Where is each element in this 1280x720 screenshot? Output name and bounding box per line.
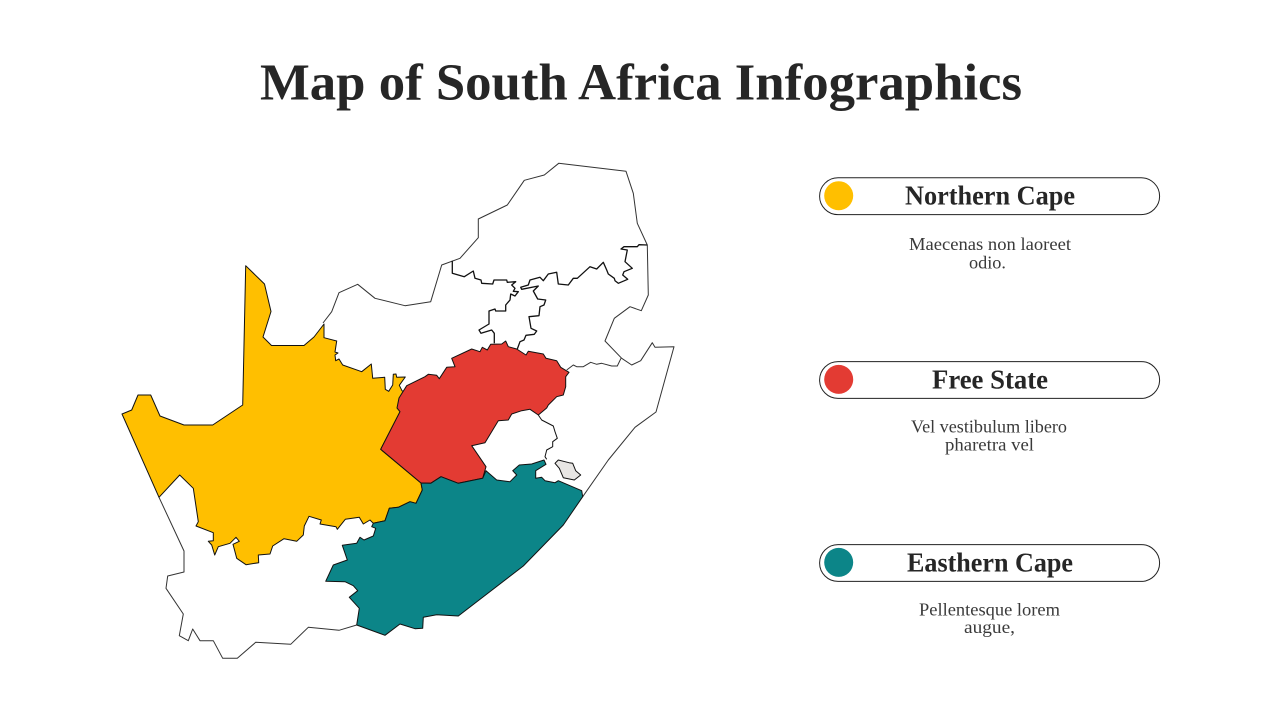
legend item: Northern Cape [820, 178, 1160, 273]
border: Mpumalanga north [517, 245, 647, 349]
marker [824, 365, 853, 394]
description [909, 234, 1071, 273]
border: Limpopo and Mpumalanga [452, 261, 518, 343]
description: pharetra vel [945, 434, 1034, 454]
region: Northern Cape [122, 266, 422, 565]
description: augue, [964, 617, 1015, 637]
legend item: Free State [820, 362, 1160, 454]
legend item: Eastern Cape [820, 545, 1160, 637]
border: KwaZulu-Natal north [567, 358, 621, 370]
description: Pellentesque lorem [919, 599, 1060, 619]
description [911, 416, 1067, 454]
pill [820, 178, 1160, 215]
map of South Africa [122, 163, 674, 658]
region: Swaziland enclave [555, 460, 581, 480]
region: Western Cape [159, 497, 357, 658]
pill [820, 362, 1160, 398]
description [919, 599, 1060, 637]
description: Maecenas non laoreet [909, 234, 1071, 254]
region: Lesotho border [538, 415, 557, 459]
region: northern and eastern provinces outline [323, 163, 674, 497]
marker [824, 181, 853, 210]
region: Eastern Cape [326, 460, 583, 635]
heading: Easthern Cape [907, 547, 1073, 577]
region: Free State [381, 341, 569, 483]
description: Vel vestibulum libero [911, 416, 1067, 436]
heading: Northern Cape [905, 180, 1075, 210]
heading: Free State [932, 364, 1048, 394]
title: Map of South Africa Infographics [260, 54, 1022, 112]
description: odio. [969, 253, 1006, 273]
marker [824, 548, 853, 577]
pill [820, 545, 1160, 581]
